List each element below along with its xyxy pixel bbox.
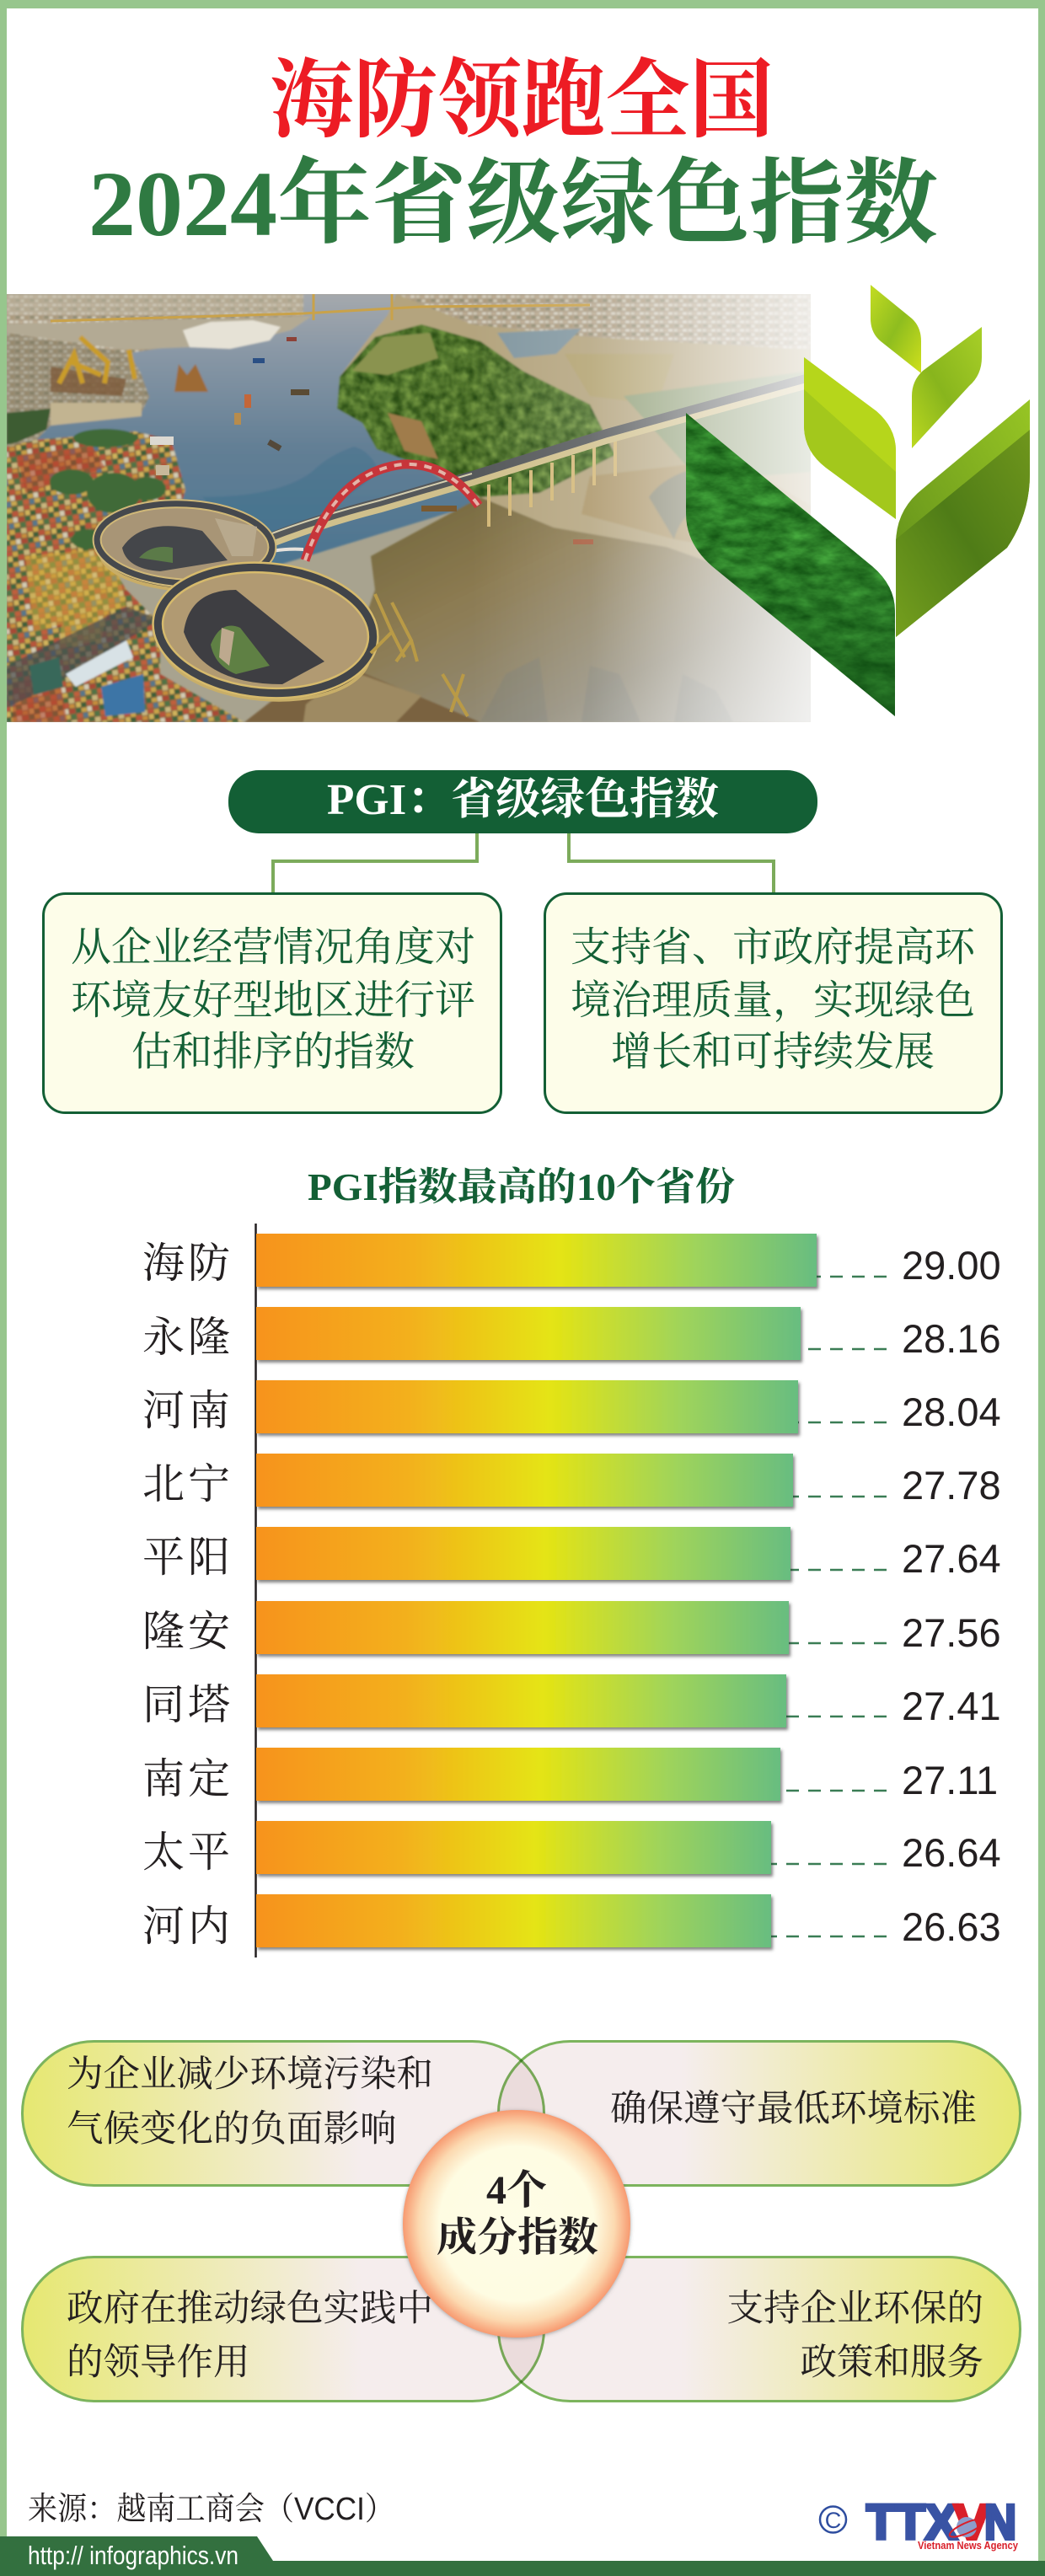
center circle: 4 component indices: 成分指数 (437, 2215, 598, 2260)
wordmark (866, 2495, 1016, 2550)
icon: leaf emblem (686, 285, 1031, 716)
lower left city (7, 431, 244, 722)
center circle: 4 component indices: 4个 (486, 2168, 547, 2213)
small top leaf (871, 285, 921, 373)
row: 河南 (142, 1380, 1001, 1434)
row: 太平 (142, 1821, 1001, 1876)
row: 隆安 (142, 1601, 1001, 1655)
row: 河内 (142, 1894, 1001, 1950)
text: component 1: 为企业减少环境污染和 (67, 2054, 433, 2095)
copyright mark: C (825, 2508, 841, 2533)
copyright mark (820, 2506, 846, 2533)
text: component 2: 确保遵守最低环境标准 (610, 2089, 977, 2129)
harbour cranes and ships (371, 594, 468, 716)
panel: definition right: 支持省、市政府提高环 (571, 925, 977, 970)
wordmark: N (984, 2495, 1016, 2550)
row: 同塔: 27.41 (902, 1684, 1001, 1728)
row: 河南: 河南 (142, 1387, 233, 1434)
text: component 4: 支持企业环保的 (726, 2289, 983, 2329)
row: 太平: 26.64 (902, 1830, 1001, 1875)
row: 太平: 太平 (142, 1829, 233, 1876)
row: 平阳: 平阳 (142, 1534, 233, 1581)
heading pill (228, 770, 817, 833)
agency name: Vietnam News Agency (918, 2539, 1019, 2552)
river lower (348, 497, 811, 722)
pills: four component shapes (22, 2041, 1020, 2402)
row: 隆安: 隆安 (142, 1608, 233, 1655)
title line 2: 2024年省级绿色指数 (88, 153, 938, 255)
row: 南定 (142, 1748, 998, 1802)
row: 南定: 南定 (142, 1755, 233, 1802)
footer bar (0, 2536, 1045, 2576)
row: 海防: 29.00 (902, 1243, 1001, 1288)
row: 北宁: 北宁 (142, 1460, 233, 1508)
logo: TTXVN (820, 2495, 1019, 2552)
panel: definition right (544, 893, 1001, 1112)
text: component 3 (67, 2289, 433, 2383)
text: component 1 (67, 2054, 433, 2150)
panel: definition right: 境治理质量，实现绿色 (571, 978, 975, 1023)
pill: top right (499, 2041, 1020, 2186)
title line 1: 海防领跑全国 (270, 54, 774, 149)
wordmark: V (954, 2495, 989, 2550)
pill: bottom left (22, 2257, 544, 2402)
pill: top left (22, 2041, 544, 2186)
dock warehouse (244, 672, 479, 722)
row: 永隆: 永隆 (142, 1314, 233, 1361)
right land (337, 294, 811, 570)
row: 平阳: 27.64 (902, 1536, 1001, 1581)
globe (947, 2516, 986, 2540)
connector lines (273, 833, 774, 893)
text: component 1: 气候变化的负面影响 (67, 2109, 396, 2150)
panel: definition left: 环境友好型地区进行评 (71, 978, 475, 1023)
middle left leaf (804, 357, 896, 519)
title (88, 54, 938, 255)
row: 南定: 27.11 (902, 1758, 998, 1802)
panel: definition left: 估和排序的指数 (131, 1030, 415, 1074)
row: 海防 (142, 1234, 1001, 1288)
row: 河内: 河内 (142, 1903, 233, 1950)
panel: definition left: 从企业经营情况角度对 (71, 925, 475, 970)
red arch (253, 464, 479, 560)
white residential island (183, 320, 281, 349)
bar chart (142, 1224, 1001, 1957)
heading pill: PGI：省级绿色指数 (327, 775, 719, 824)
upper loop ramp (95, 500, 274, 594)
row: 同塔: 同塔 (142, 1681, 233, 1728)
row: 北宁 (142, 1454, 1001, 1508)
row: 隆安: 27.56 (902, 1610, 1001, 1655)
text: component 4 (726, 2289, 983, 2383)
footer bar: http:// infographics.vn (28, 2541, 238, 2570)
upper left shipyard land (7, 378, 148, 446)
row: 河南: 28.04 (902, 1390, 1001, 1434)
small right leaf (912, 327, 982, 448)
main bridge (271, 374, 804, 546)
panel: definition left (44, 893, 501, 1112)
wordmark: TTX (866, 2495, 957, 2550)
shipyard cranes (51, 367, 126, 396)
text: component 3: 的领导作用 (67, 2343, 249, 2383)
row: 平阳 (142, 1527, 1001, 1581)
text: component 4: 政策和服务 (801, 2343, 983, 2383)
river upper (36, 294, 480, 573)
far bridge (51, 305, 590, 321)
row: 海防: 海防 (142, 1240, 233, 1287)
row: 河内: 26.63 (902, 1904, 1001, 1949)
center circle: 4 component indices (403, 2110, 630, 2338)
dark textured leaf (686, 413, 895, 716)
row: 北宁: 27.78 (902, 1463, 1001, 1508)
row: 同塔 (142, 1674, 1001, 1728)
lower loop ramp (153, 559, 378, 709)
row: 永隆: 28.16 (902, 1316, 1001, 1361)
pill: bottom right (499, 2257, 1020, 2402)
chart axis (255, 1224, 257, 1957)
chart heading: PGI指数最高的10个省份 (308, 1165, 735, 1208)
photo: aerial view of Hai Phong bridge and river (7, 294, 811, 722)
big right leaf (896, 399, 1031, 640)
terrain (7, 294, 811, 722)
text: component 3: 政府在推动绿色实践中 (67, 2289, 433, 2329)
source: 来源：越南工商会（VCCI） (28, 2492, 394, 2527)
row: 永隆 (142, 1307, 1001, 1361)
photo fade to white (472, 294, 811, 722)
panel: definition right: 增长和可持续发展 (611, 1030, 935, 1074)
